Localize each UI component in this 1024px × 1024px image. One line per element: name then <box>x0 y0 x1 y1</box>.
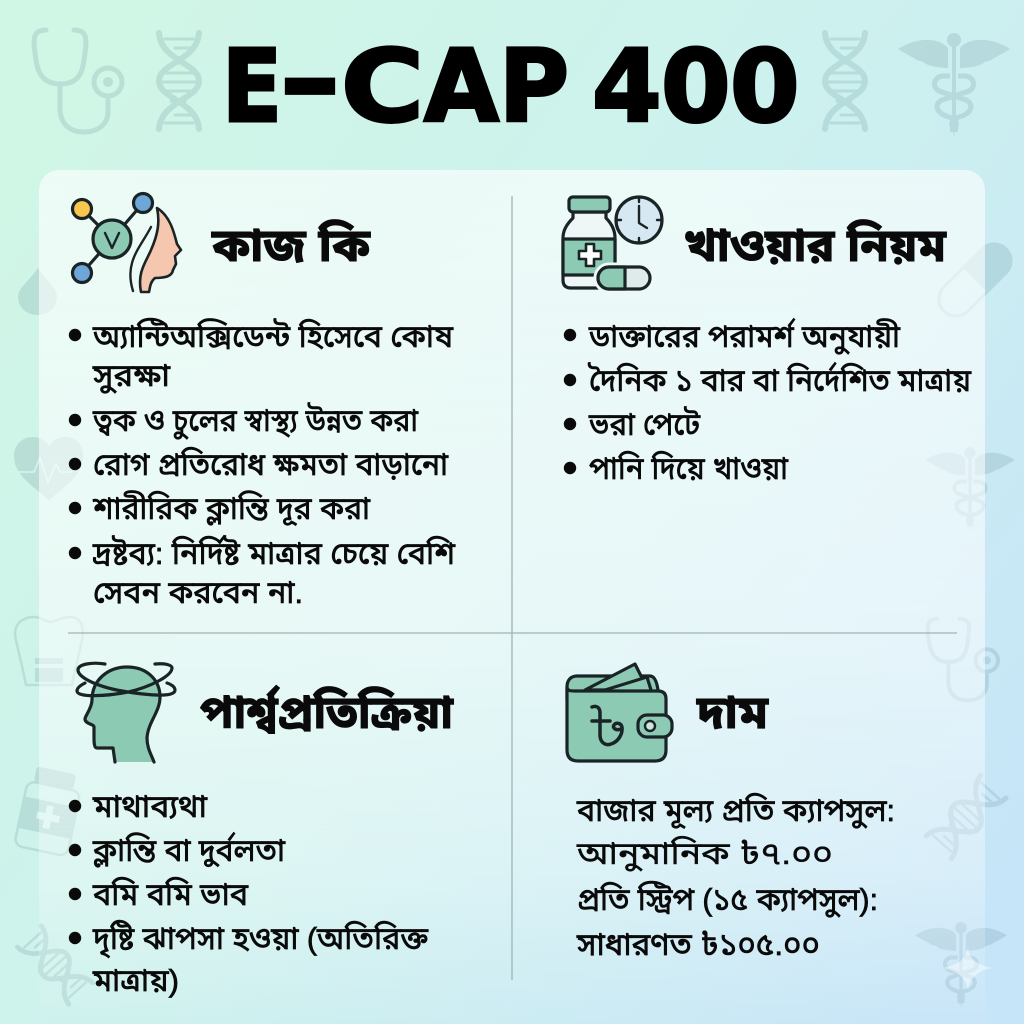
bullet list: side effects: বমি বমি ভাব <box>92 877 249 912</box>
price details: সাধারণত ৳১০৫.০০ <box>576 927 820 962</box>
watermark: caduceus right <box>925 447 1015 530</box>
icon: dizzy head <box>77 663 175 762</box>
bullet list: side effects: মাথাব্যথা <box>92 789 208 824</box>
heading: price: দাম <box>696 686 769 738</box>
bullet list: what it does: সেবন করবেন না. <box>93 575 303 610</box>
bullet list: what it does: অ্যান্টিঅক্সিডেন্ট হিসেবে কোষ <box>92 319 454 354</box>
title: 0 <box>730 28 800 145</box>
watermark: dna lower left <box>17 926 93 1004</box>
bullet list: side effects: দৃষ্টি ঝাপসা হওয়া (অতিরিক্ত <box>92 921 429 958</box>
watermark: capsule right <box>932 237 1018 323</box>
panel: side effects <box>69 663 454 998</box>
icon: vitamin molecule and face <box>72 194 181 292</box>
horizontal divider <box>68 632 957 634</box>
bullet list: side effects: ক্লান্তি বা দুর্বলতা <box>92 832 286 868</box>
watermark: dna top left <box>159 33 199 129</box>
title: - <box>279 22 341 139</box>
title: P <box>499 28 569 145</box>
bullet list: what it does: সুরক্ষা <box>92 358 171 393</box>
bullet list: side effects: মাত্রায়) <box>92 963 179 998</box>
watermark: stethoscope right <box>928 619 998 700</box>
watermark: caduceus top right <box>898 33 1010 137</box>
heading: side effects: পার্শ্বপ্রতিক্রিয়া <box>200 685 454 738</box>
bullet list: how to take <box>564 318 972 486</box>
price details <box>576 793 895 962</box>
bullet list: side effects <box>69 789 429 998</box>
watermark: stethoscope top left <box>34 30 122 132</box>
vertical divider <box>511 196 513 980</box>
icon: medicine bottle, clock and capsule <box>563 197 662 289</box>
price details: প্রতি স্ট্রিপ (১৫ ক্যাপসুল): <box>577 882 878 917</box>
panel: how to take <box>563 197 972 486</box>
watermark: heart pulse left <box>11 437 83 500</box>
heading: what it does: কাজ কি <box>211 219 371 271</box>
price details: আনুমানিক ৳৭.০০ <box>576 836 833 871</box>
watermark: sparkle <box>943 947 992 990</box>
title: C <box>341 28 424 145</box>
watermark: dna lower right <box>926 775 1006 859</box>
panel: price <box>567 664 895 962</box>
watermark: dna top right <box>825 33 865 129</box>
bullet list: how to take: দৈনিক ১ বার বা নির্দেশিত মাত্রায় <box>588 362 972 398</box>
bullet list: what it does: ত্বক ও চুলের স্বাস্থ্য উন্নত করা <box>92 403 419 440</box>
bullet list: how to take: পানি দিয়ে খাওয়া <box>589 451 789 486</box>
watermark: medicine bottle left <box>14 765 84 857</box>
bullet list: what it does: শারীরিক ক্লান্তি দূর করা <box>92 491 371 526</box>
title: E <box>222 28 282 145</box>
title: 0 <box>661 28 731 145</box>
price details: বাজার মূল্য প্রতি ক্যাপসুল: <box>576 793 895 829</box>
title: 4 <box>592 28 662 145</box>
watermark: caduceus bottom right <box>915 922 1007 1007</box>
main panel <box>39 170 985 1024</box>
watermark: drop left <box>18 268 57 315</box>
bullet list: what it does <box>69 319 456 610</box>
icon: wallet with taka sign <box>567 664 672 761</box>
bullet list: how to take: ভরা পেটে <box>588 407 701 442</box>
bullet list: what it does: দ্রষ্টব্য: নির্দিষ্ট মাত্রার চেয়ে বেশি <box>92 535 456 571</box>
heading: how to take: খাওয়ার নিয়ম <box>684 219 947 271</box>
title: A <box>424 28 499 145</box>
watermark: tooth outline left <box>15 617 83 685</box>
bullet list: what it does: রোগ প্রতিরোধ ক্ষমতা বাড়ানো <box>93 447 449 482</box>
bullet list: how to take: ডাক্তারের পরামর্শ অনুযায়ী <box>588 318 901 354</box>
panel: what it does <box>69 194 456 610</box>
